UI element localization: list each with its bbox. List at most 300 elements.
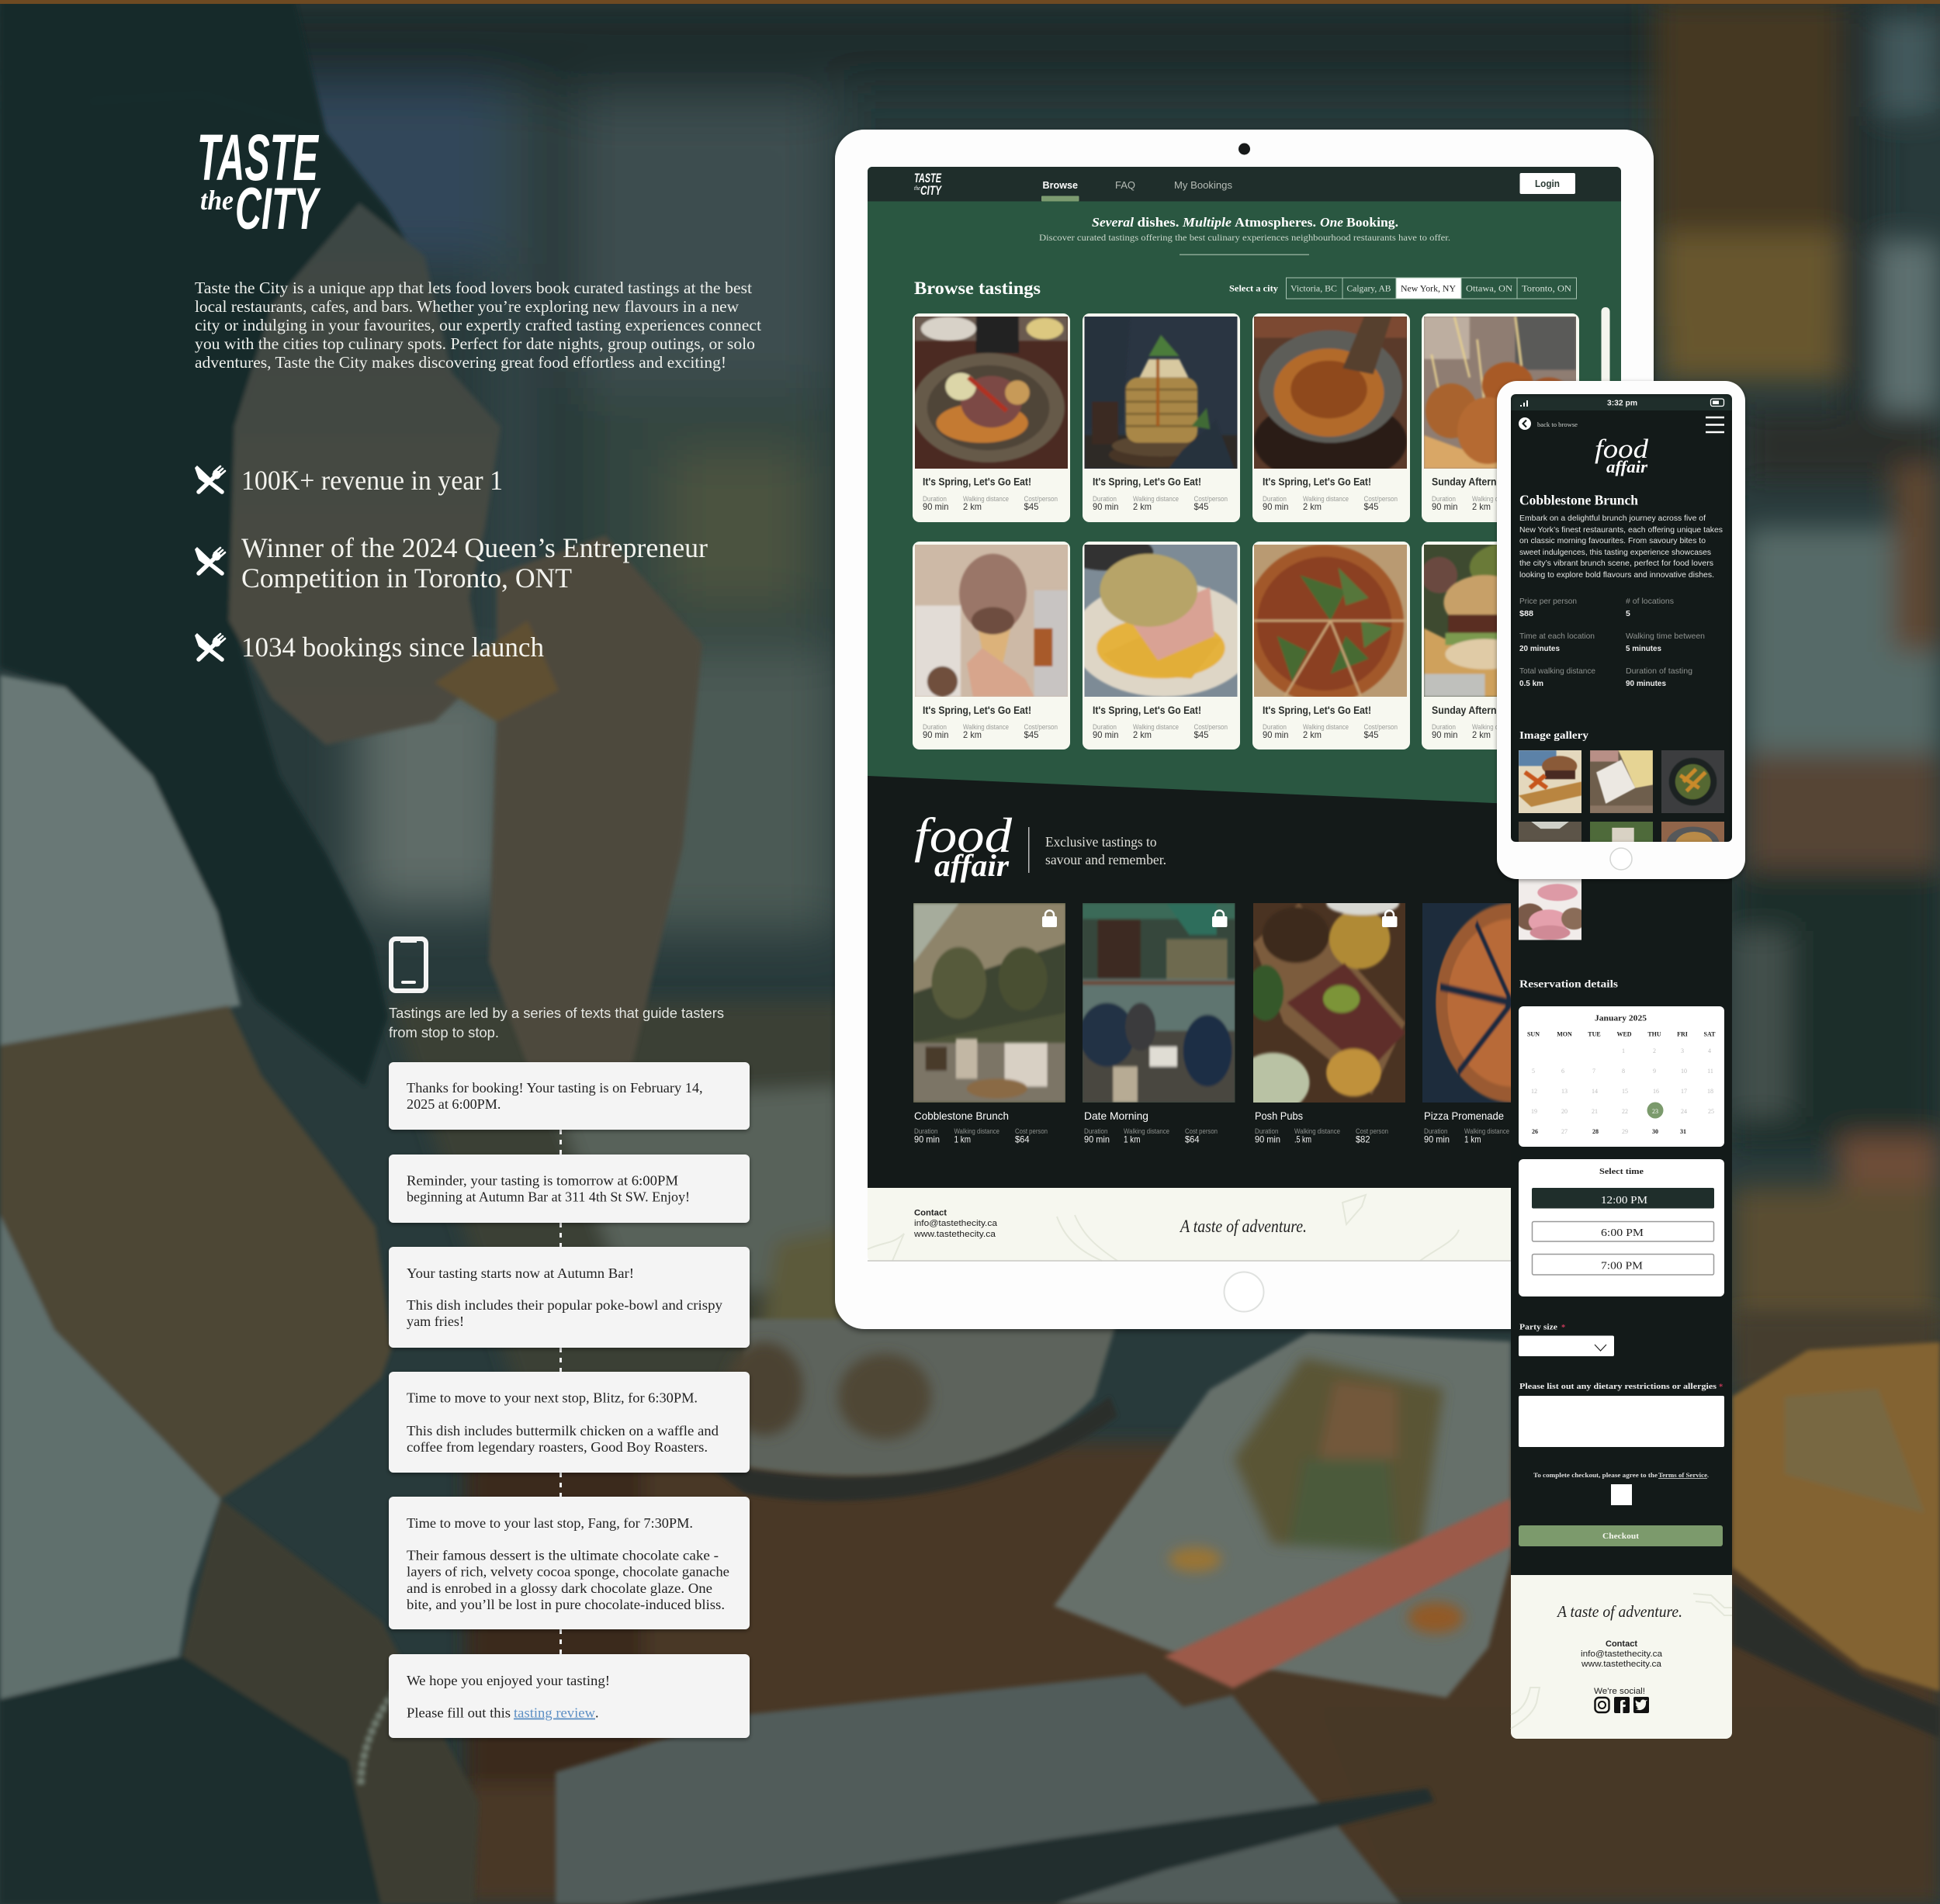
napkin [556, 1674, 1401, 1904]
hair [0, 95, 419, 1086]
selected date [1647, 1102, 1664, 1119]
tasting description: the city’s vibrant brunch scene, perfect for food lovers [1519, 559, 1713, 568]
calendar: 12 [1531, 1088, 1537, 1095]
experience card: Date Morning: Date Morning [1084, 1110, 1148, 1122]
experience card: Date Morning: 1 km [1124, 1134, 1141, 1145]
text message 4: coffee from legendary roasters, Good Boy Roasters. [407, 1439, 708, 1455]
text message 3 [389, 1247, 750, 1348]
text message 1: Thanks for booking! Your tasting is on February 14, [407, 1080, 703, 1096]
headline: One [1320, 215, 1343, 230]
text message 6: tasting review [514, 1705, 595, 1721]
image gallery [1515, 750, 1724, 940]
shirt [0, 675, 241, 1045]
tasting card 2: Walking distance [1133, 495, 1179, 503]
icon: fork and knife [195, 547, 225, 573]
navigation bar: Browse [1043, 179, 1078, 191]
experience card: Posh Pubs: Cost person [1356, 1127, 1388, 1135]
food affair logo: affair [934, 848, 1009, 883]
tasting card 5: Cost/person [1024, 723, 1058, 731]
tasting description: New York’s finest restaurants, each offering unique takes [1519, 525, 1723, 535]
text message 4: This dish includes buttermilk chicken on a waffle and [407, 1423, 719, 1438]
experience card: Posh Pubs: $82 [1356, 1134, 1370, 1145]
photo: ice cream cone [915, 545, 1068, 697]
experience card: Posh Pubs: Duration [1255, 1127, 1279, 1135]
tasting card 6: $45 [1193, 729, 1209, 740]
logo: Taste the City: CITY [235, 176, 321, 242]
calendar: 11 [1707, 1068, 1713, 1075]
experience card: Cobblestone Brunch: Walking distance [954, 1127, 999, 1135]
calendar: 28 [1592, 1128, 1599, 1135]
experience card: Pizza Promenade: Duration [1424, 1127, 1448, 1135]
text message 2 [389, 1155, 750, 1223]
browse heading: Browse tastings [914, 279, 1041, 298]
terms of service agreement [1533, 1472, 1709, 1505]
subheadline: Discover curated tastings offering the best culinary experiences neighbourhood restaurants have to offer. [1039, 232, 1450, 243]
tasting card 5: $45 [1024, 729, 1039, 740]
social icons [1595, 1697, 1649, 1713]
tasting stats: 20 minutes [1519, 644, 1560, 653]
tasting card 5: Walking distance [963, 723, 1009, 731]
tasting card 3: 2 km [1303, 501, 1322, 512]
tasting card 4: Sunday Afternoon [1432, 475, 1514, 487]
hand and forearm [489, 535, 702, 1086]
food affair tagline: Exclusive tastings to [1045, 834, 1156, 850]
login button: Login [1535, 178, 1560, 189]
photo: burger on board [1424, 545, 1497, 697]
lock icon [1382, 911, 1397, 927]
tasting card 3: It's Spring, Let's Go Eat! [1263, 475, 1371, 487]
intro paragraph: adventures, Taste the City makes discovering great food effortless and exciting! [195, 353, 726, 372]
mobile footer: We're social! [1594, 1687, 1645, 1696]
tasting card 2: 90 min [1093, 501, 1119, 512]
experience card: Posh Pubs: 90 min [1255, 1134, 1280, 1145]
phone home button [1610, 848, 1632, 870]
tasting card 6: It's Spring, Let's Go Eat! [1093, 704, 1201, 716]
dietary restrictions field: * [1719, 1383, 1723, 1392]
tasting card 6: Cost/person [1193, 723, 1228, 731]
time picker: 7:00 PM [1601, 1260, 1644, 1272]
tasting card 5: It's Spring, Let's Go Eat! [923, 704, 1031, 716]
tasting card 1: Duration [923, 495, 947, 503]
tasting card 6 [1062, 534, 1256, 749]
time picker [1519, 1159, 1724, 1296]
tasting card 3: Walking distance [1303, 495, 1349, 503]
terms of service agreement: To complete checkout, please agree to the [1533, 1472, 1658, 1479]
experience card: Date Morning: Duration [1084, 1127, 1108, 1135]
photo: plated meat [915, 317, 1068, 469]
tasting card 4: Duration [1432, 495, 1456, 503]
headline: Several [1092, 215, 1134, 230]
tasting card 7: Cost/person [1364, 723, 1398, 731]
terms of service agreement: . [1707, 1472, 1709, 1479]
contact details: www.tastethecity.ca [913, 1230, 996, 1239]
footer tagline: A taste of adventure. [1179, 1217, 1307, 1236]
tasting card 8: 90 min [1432, 729, 1457, 740]
tasting card 1: $45 [1024, 501, 1039, 512]
tasting card 7: Walking distance [1303, 723, 1349, 731]
calendar: 26 [1532, 1128, 1538, 1135]
calendar: WED [1616, 1030, 1632, 1038]
calendar: 25 [1708, 1108, 1714, 1115]
tablet home button [1225, 1272, 1263, 1311]
tasting stats: Walking time between [1626, 632, 1705, 641]
tasting card 8: 2 km [1472, 729, 1491, 740]
scrollbar [1602, 307, 1609, 393]
back link [1519, 417, 1578, 430]
tasting stats: $88 [1519, 609, 1533, 618]
party size field: * [1561, 1324, 1565, 1332]
experience card: Date Morning: $64 [1185, 1134, 1200, 1145]
text message 1: 2025 at 6:00PM. [407, 1096, 501, 1112]
calendar: 16 [1653, 1088, 1659, 1095]
tasting card 8: Walking distance [1472, 723, 1518, 731]
experience card: Posh Pubs: Walking distance [1294, 1127, 1340, 1135]
experience card: Cobblestone Brunch: 90 min [914, 1134, 940, 1145]
intro paragraph: local restaurants, cafes, and bars. Whether you’re exploring new flavours in a new [195, 297, 740, 316]
tasting card 4: Walking distance [1472, 495, 1518, 503]
experience card: Pizza Promenade: 90 min [1424, 1134, 1450, 1145]
calendar: 21 [1592, 1108, 1598, 1115]
food affair tagline [1045, 834, 1166, 867]
tasting stats [1519, 597, 1705, 688]
square plate [1054, 1332, 1511, 1698]
tasting card 4 [1422, 313, 1579, 522]
photo: sliders on skewers [1424, 317, 1576, 469]
mobile footer: www.tastethecity.ca [1581, 1660, 1662, 1669]
tasting card 2: It's Spring, Let's Go Eat! [1093, 475, 1201, 487]
city selector: Select a city [1229, 284, 1278, 293]
intro paragraph: city or indulging in your favourites, our expertly crafted tasting experiences connect [195, 316, 761, 334]
back link: back to browse [1537, 421, 1578, 428]
calendar: TUE [1588, 1030, 1601, 1038]
experience card: Date Morning [1079, 903, 1235, 1145]
text message 6: Please fill out this [407, 1705, 511, 1721]
contact details: Contact [914, 1209, 947, 1218]
city selector: Ottawa, ON [1466, 284, 1513, 293]
text message 2: Reminder, your tasting is tomorrow at 6:00PM [407, 1173, 678, 1189]
photo: pancake stack [1085, 317, 1237, 469]
text series intro [389, 1006, 724, 1040]
connector dots between text messages [559, 1130, 562, 1654]
dietary restrictions field: Please list out any dietary restrictions or allergies [1519, 1383, 1717, 1391]
calendar: 2 [1653, 1047, 1656, 1054]
city selector: Victoria, BC [1290, 284, 1337, 293]
tasting card 8: Duration [1432, 723, 1456, 731]
tasting card 5 [913, 542, 1070, 749]
tasting stats: 5 minutes [1626, 644, 1661, 653]
headline: Multiple [1182, 215, 1232, 230]
calendar: 5 [1532, 1068, 1535, 1075]
tasting description: sweet indulgences, this tasting experience showcases [1519, 548, 1711, 557]
experience card: Cobblestone Brunch: 1 km [954, 1134, 971, 1145]
tasting card 6: Walking distance [1133, 723, 1179, 731]
logo: Taste the City [197, 121, 321, 242]
headline [1092, 215, 1398, 230]
text message 2: beginning at Autumn Bar at 311 4th St SW. Enjoy! [407, 1189, 690, 1204]
dietary restrictions field [1519, 1383, 1724, 1447]
photo: macarons [1519, 879, 1581, 940]
city selector: New York, NY [1401, 284, 1457, 293]
party size field: Party size [1519, 1324, 1557, 1331]
experience card: Date Morning: Walking distance [1124, 1127, 1169, 1135]
city selector: Toronto, ON [1522, 284, 1572, 293]
navigation bar: FAQ [1115, 179, 1135, 191]
tasting card 5: 2 km [963, 729, 982, 740]
experience card: Cobblestone Brunch: $64 [1015, 1134, 1030, 1145]
tasting card 3 [1252, 313, 1410, 522]
time picker: Select time [1599, 1167, 1644, 1176]
calendar: 15 [1622, 1088, 1628, 1095]
tasting card 2: Cost/person [1193, 495, 1228, 503]
party size field [1519, 1324, 1614, 1356]
tasting card 2: $45 [1193, 501, 1209, 512]
tasting card 7: 90 min [1263, 729, 1288, 740]
tasting card 8: Sunday Afternoon [1432, 704, 1514, 716]
tasting card 7: Duration [1263, 723, 1287, 731]
photo: egg and ham biscuit [1085, 545, 1237, 697]
food affair logo [914, 808, 1013, 883]
reservation heading: Reservation details [1519, 979, 1619, 990]
tasting card 5: 90 min [923, 729, 948, 740]
logo: Taste the City: TASTE [197, 121, 320, 194]
city selector [1229, 278, 1577, 299]
calendar: 9 [1653, 1068, 1656, 1075]
tasting card 4: 2 km [1472, 501, 1491, 512]
text message 4 [389, 1372, 750, 1473]
lock icon [1212, 911, 1228, 927]
lock icon [1042, 911, 1057, 927]
nav logo: the [914, 185, 920, 192]
tasting description: looking to explore bold flavours and innovative dishes. [1519, 570, 1714, 580]
photo: creme brulee bowl [1254, 317, 1407, 469]
mobile footer: Contact [1606, 1639, 1637, 1649]
calendar: 19 [1531, 1108, 1537, 1115]
intro paragraph: you with the cities top culinary spots. Perfect for date nights, group outings, or solo [195, 334, 755, 353]
calendar: FRI [1677, 1030, 1688, 1038]
calendar: 27 [1561, 1128, 1568, 1135]
pizza [1732, 1342, 1940, 1691]
navigation bar: My Bookings [1174, 179, 1233, 191]
text message 5: Time to move to your last stop, Fang, for 7:30PM. [407, 1515, 693, 1531]
calendar: 1 [1622, 1047, 1625, 1054]
text series intro: from stop to stop. [389, 1025, 499, 1040]
stat: competition winner: Competition in Toronto, ONT [241, 563, 572, 594]
tasting stats: Duration of tasting [1626, 666, 1692, 676]
tasting card 3: Cost/person [1364, 495, 1398, 503]
tasting card 2: 2 km [1133, 501, 1152, 512]
arm [0, 1006, 392, 1499]
text message 5 [389, 1497, 750, 1629]
checkout button [1519, 1525, 1723, 1546]
tasting description: Embark on a delightful brunch journey across five of [1519, 514, 1706, 523]
login button [1519, 173, 1575, 194]
experience card: Cobblestone Brunch [913, 903, 1065, 1145]
text message 3: Your tasting starts now at Autumn Bar! [407, 1265, 634, 1281]
calendar: 10 [1681, 1068, 1687, 1075]
tasting stats: Time at each location [1519, 632, 1595, 641]
text message 5: Their famous dessert is the ultimate chocolate cake - [407, 1547, 719, 1563]
calendar: 31 [1680, 1128, 1686, 1135]
experience card: Cobblestone Brunch: Cobblestone Brunch [914, 1110, 1009, 1122]
experience card: Cobblestone Brunch: Duration [914, 1127, 937, 1135]
calendar: 24 [1681, 1108, 1687, 1115]
mobile status bar [1511, 394, 1732, 410]
mobile screen: scrolling detail page [1511, 394, 1732, 1739]
menu icon [1706, 417, 1724, 432]
tasting description [1519, 514, 1723, 580]
experience card: Date Morning: 90 min [1084, 1134, 1110, 1145]
contact details [913, 1209, 998, 1239]
city selector: Calgary, AB [1347, 284, 1391, 293]
mobile footer: info@tastethecity.ca [1581, 1650, 1663, 1659]
text message 3: This dish includes their popular poke-bowl and crispy [407, 1297, 722, 1313]
text message 6 [389, 1654, 750, 1738]
calendar: 8 [1622, 1068, 1625, 1075]
tasting card 4: 90 min [1432, 501, 1457, 512]
tablet camera [1238, 143, 1250, 155]
experience card: Pizza Promenade: Walking distance [1464, 1127, 1509, 1135]
nav logo: TASTE [914, 171, 941, 185]
tasting card 3: Duration [1263, 495, 1287, 503]
calendar: 4 [1708, 1047, 1711, 1054]
pink wrapper stick [1164, 1498, 1511, 1688]
photo: steak board [1253, 903, 1405, 1103]
stat: competition winner [195, 532, 708, 594]
calendar: 13 [1561, 1088, 1568, 1095]
knife [621, 1788, 1434, 1904]
photo: pizza on navy [1422, 903, 1511, 1103]
headline: Booking. [1346, 215, 1398, 230]
time picker: 12:00 PM [1601, 1195, 1648, 1206]
text message 5: and is enrobed in a glossy dark chocolate glaze. One [407, 1580, 712, 1596]
text message 6: We hope you enjoyed your tasting! [407, 1673, 610, 1688]
calendar: THU [1647, 1030, 1661, 1038]
tasting stats: 0.5 km [1519, 679, 1543, 688]
checkout button: Checkout [1602, 1532, 1640, 1541]
tasting card 7 [1245, 542, 1410, 749]
calendar: 22 [1622, 1108, 1628, 1115]
photo: garden terrace [913, 903, 1065, 1103]
headline: Atmospheres. [1235, 215, 1316, 230]
tasting title: Cobblestone Brunch [1519, 492, 1638, 507]
text message 3: yam fries! [407, 1314, 464, 1329]
tasting card 1: 2 km [963, 501, 982, 512]
tasting card 1: 90 min [923, 501, 948, 512]
tasting card 1: Walking distance [963, 495, 1009, 503]
text message 5: layers of rich, velvety cocoa sponge, chocolate ganache [407, 1564, 729, 1580]
calendar: MON [1557, 1030, 1572, 1038]
calendar: January 2025 [1595, 1013, 1647, 1023]
calendar: 3 [1681, 1047, 1684, 1054]
tasting card 5: Duration [923, 723, 947, 731]
logo: Taste the City: the [200, 185, 234, 216]
mobile footer [1511, 1575, 1732, 1739]
tasting card 6: 90 min [1093, 729, 1119, 740]
icon: fork and knife [195, 466, 225, 492]
tasting stats: Total walking distance [1519, 666, 1595, 676]
mobile food affair logo: food [1595, 434, 1649, 464]
experience card: Posh Pubs [1236, 891, 1405, 1145]
mobile status bar: 3:32 pm [1607, 399, 1637, 408]
photo: arugula pizza [1254, 545, 1407, 697]
face [229, 203, 501, 745]
tasting stats: 90 minutes [1626, 679, 1666, 688]
tasting stats: 5 [1626, 609, 1630, 618]
stat: revenue: 100K+ revenue in year 1 [241, 465, 503, 496]
tasting card 6: 2 km [1133, 729, 1152, 740]
calendar: 14 [1592, 1088, 1598, 1095]
tablet device [835, 130, 1654, 1329]
calendar: 17 [1681, 1088, 1687, 1095]
text series intro: Tastings are led by a series of texts that guide tasters [389, 1006, 724, 1021]
tasting card 6: Duration [1093, 723, 1117, 731]
experience card: Pizza Promenade: 1 km [1464, 1134, 1481, 1145]
calendar: 6 [1561, 1068, 1564, 1075]
photo: sidewalk cafe [1083, 903, 1235, 1103]
image gallery heading: Image gallery [1519, 730, 1588, 742]
experience card: Posh Pubs: .5 km [1294, 1134, 1311, 1145]
tasting stats: # of locations [1626, 597, 1674, 606]
experience card: Cobblestone Brunch: Cost person [1015, 1127, 1048, 1135]
time picker: 6:00 PM [1601, 1227, 1644, 1239]
intro paragraph [195, 279, 761, 372]
tasting card 7: It's Spring, Let's Go Eat! [1263, 704, 1371, 716]
calendar [1519, 1006, 1724, 1147]
phone device frame [1497, 381, 1745, 879]
tasting card 1 [912, 313, 1070, 522]
tasting card 2 [1083, 313, 1240, 522]
text message 6: . [595, 1705, 599, 1721]
experience card: Pizza Promenade: Pizza Promenade [1424, 1110, 1504, 1122]
tasting description: on classic morning favourites. From savoury bites to [1519, 536, 1706, 545]
tasting card 8 [1421, 542, 1579, 749]
text message 1 [389, 1062, 750, 1130]
tasting card 7: 2 km [1303, 729, 1322, 740]
tablet screen: browse section [868, 167, 1621, 822]
contact details: info@tastethecity.ca [914, 1219, 998, 1228]
stat: bookings: 1034 bookings since launch [241, 632, 544, 663]
mobile footer: A taste of adventure. [1556, 1602, 1682, 1621]
calendar: 18 [1707, 1088, 1713, 1095]
experience card: Posh Pubs: Posh Pubs [1255, 1110, 1303, 1122]
tasting card 1: It's Spring, Let's Go Eat! [923, 475, 1031, 487]
selected date: 23 [1652, 1108, 1658, 1115]
tasting card 3: $45 [1364, 501, 1379, 512]
tasting stats: Price per person [1519, 597, 1577, 606]
experience card: Date Morning: Cost person [1185, 1127, 1218, 1135]
tablet footer [868, 1188, 1512, 1261]
experience card: Pizza Promenade [1422, 903, 1588, 1145]
nav logo: CITY [920, 183, 942, 198]
calendar: SUN [1527, 1030, 1540, 1038]
calendar: 30 [1652, 1128, 1658, 1135]
calendar: SAT [1704, 1030, 1716, 1038]
text message 4: Time to move to your next stop, Blitz, for 6:30PM. [407, 1390, 698, 1406]
stat: competition winner: Winner of the 2024 Queen’s Entrepreneur [241, 532, 708, 563]
headline: dishes. [1138, 215, 1180, 230]
icon: fork and knife [195, 633, 225, 659]
mobile food affair logo: affair [1606, 457, 1647, 476]
tasting card 1: Cost/person [1024, 495, 1058, 503]
tablet screen: food affair section [868, 776, 1588, 1188]
calendar: 20 [1561, 1108, 1568, 1115]
tasting card 3: 90 min [1263, 501, 1288, 512]
dark plate rim [698, 1397, 1117, 1501]
terms of service agreement: Terms of Service [1658, 1472, 1707, 1479]
food affair logo: food [914, 808, 1013, 863]
calendar: 7 [1592, 1068, 1595, 1075]
icon: phone [391, 939, 426, 991]
